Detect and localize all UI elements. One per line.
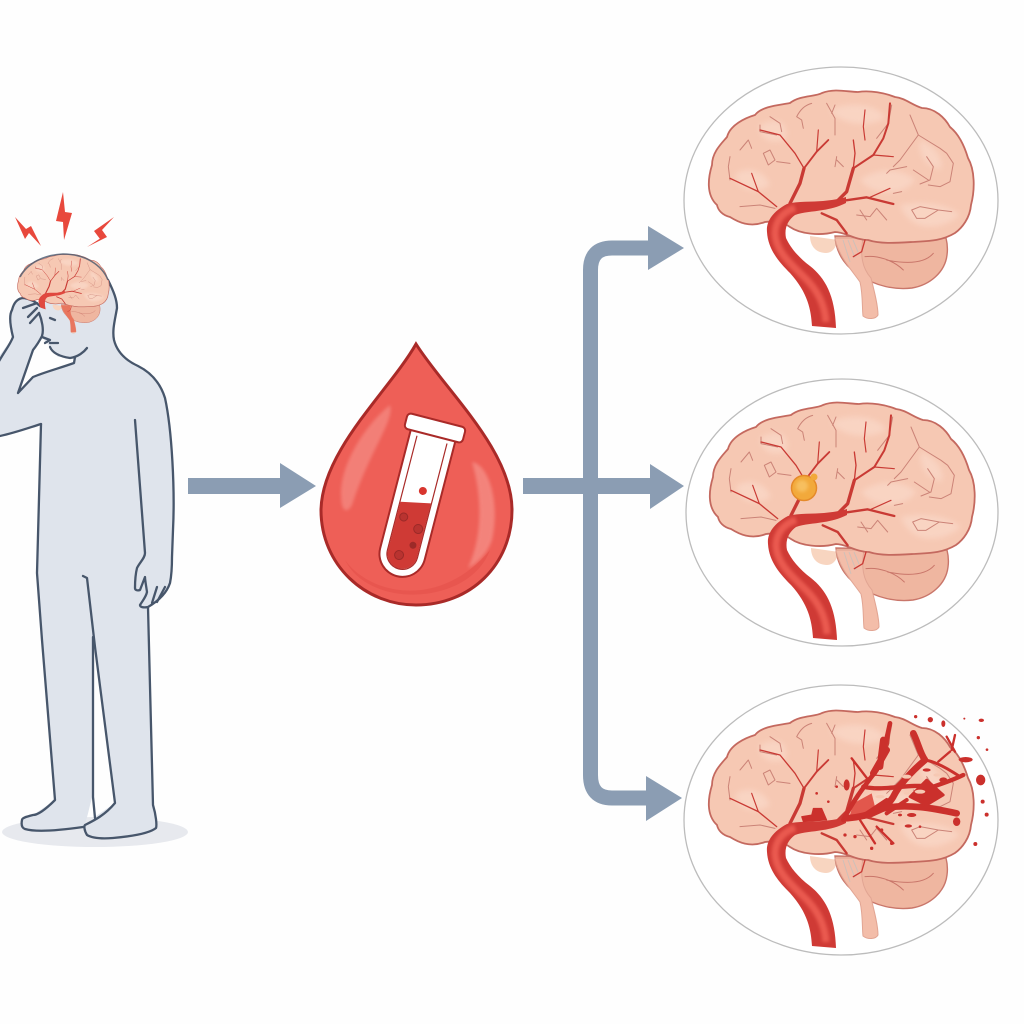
ground shadow xyxy=(2,817,188,847)
test tube xyxy=(367,413,466,585)
arrow: person to blood test xyxy=(188,463,316,508)
icon: clot xyxy=(792,474,818,500)
white gap between legs xyxy=(93,640,115,816)
body silhouette xyxy=(0,256,174,838)
icon: head brain xyxy=(18,254,109,333)
white gap under arm xyxy=(18,337,75,393)
person with headache xyxy=(0,256,188,847)
icon: pain bolts xyxy=(15,192,114,247)
panel: normal brain xyxy=(684,67,998,334)
blood drop xyxy=(321,344,512,605)
body outlines xyxy=(0,280,174,838)
hemorrhage spread xyxy=(802,715,989,850)
icon: blood drop with test tube xyxy=(321,344,512,605)
pale gaps inside bleed xyxy=(875,773,940,798)
arrow: branching to three outcomes xyxy=(523,226,684,821)
panel: brain with clot xyxy=(686,379,998,646)
panel: brain with hemorrhage xyxy=(684,685,998,955)
head outline above brain xyxy=(20,254,108,280)
